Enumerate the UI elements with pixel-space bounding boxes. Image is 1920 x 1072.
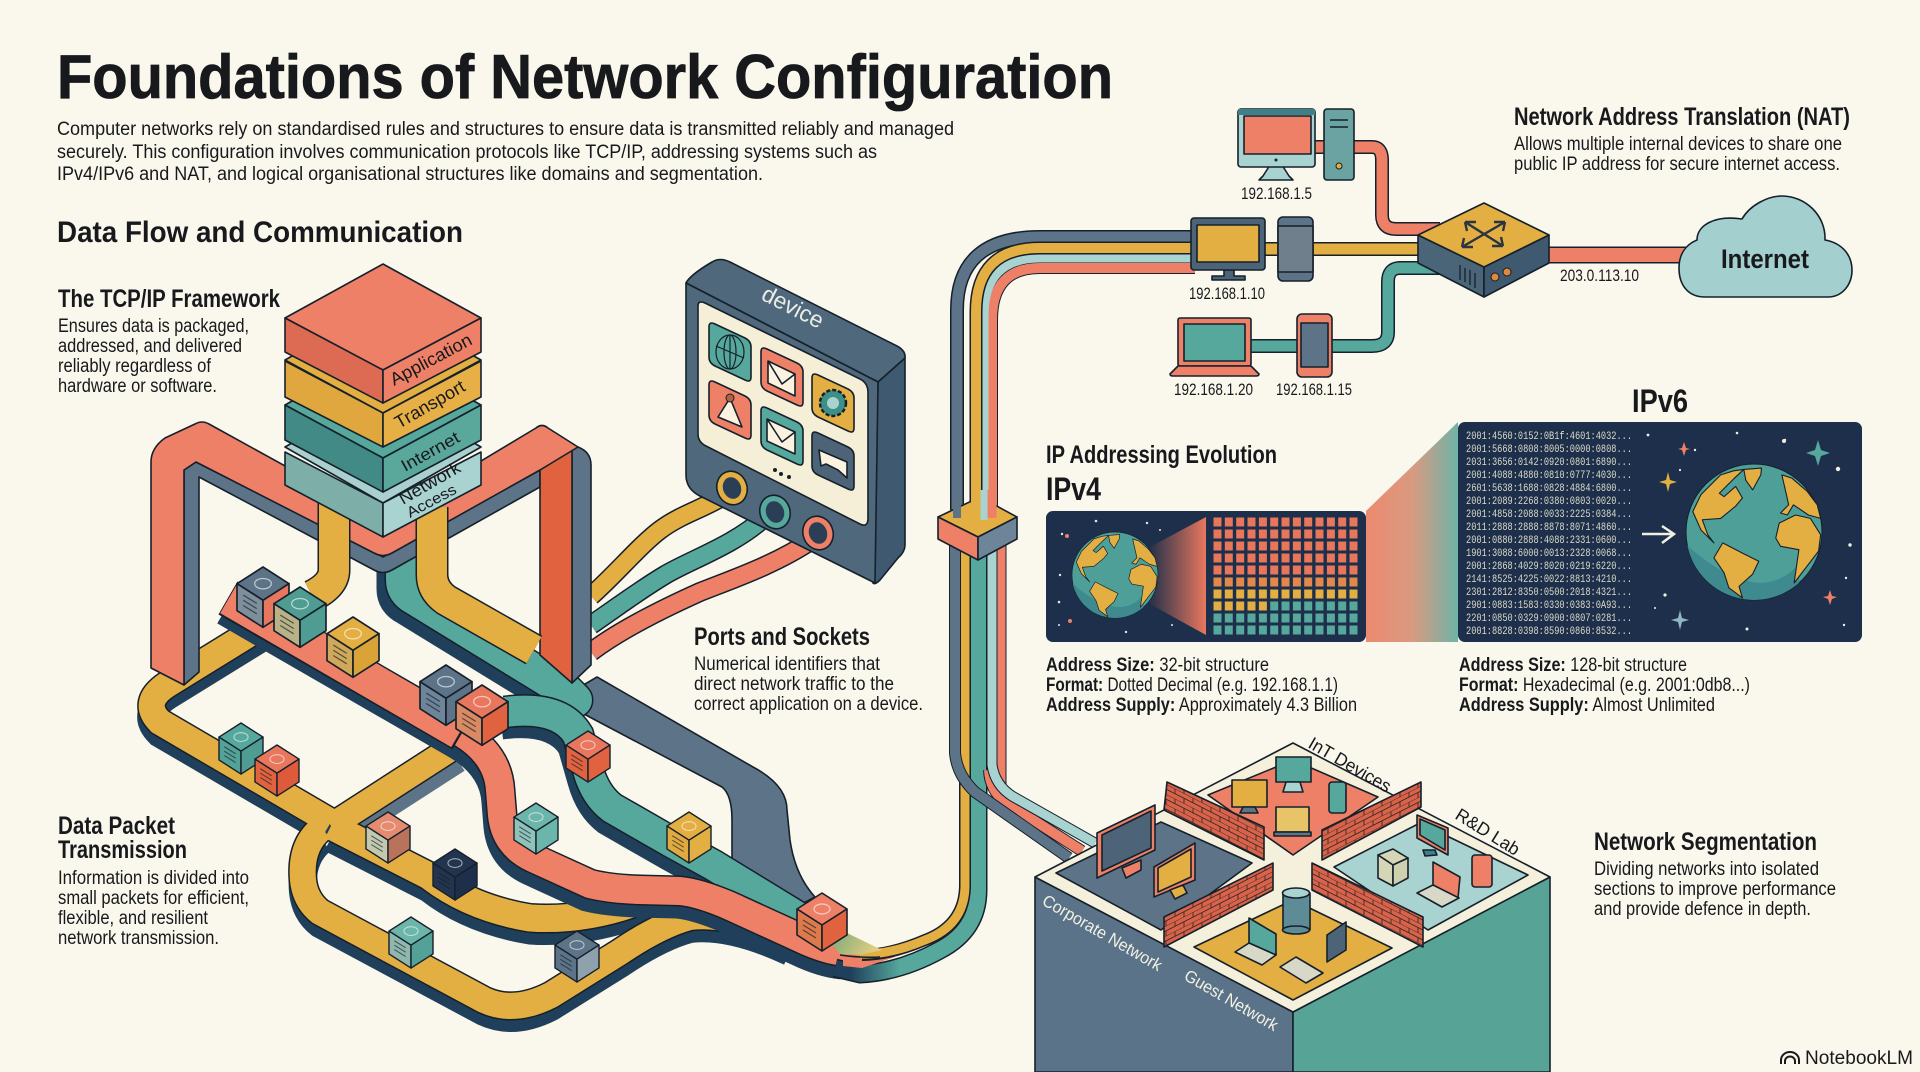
layer: transport: [285, 305, 481, 447]
icon: internet cloud: [1679, 196, 1852, 297]
text: NAT: Allows multiple internal devices to share one: [1514, 134, 1842, 155]
coral frame around stack: [151, 422, 591, 685]
hexadecimal list: 2001:2089:2268:0380:0803:0020...: [1466, 496, 1632, 508]
text: ports and sockets: [694, 623, 923, 715]
block left face: [1035, 877, 1293, 1072]
IPv4 facts: [1046, 655, 1357, 716]
hexadecimal list: 2901:0883:1583:0330:0383:0A93...: [1466, 600, 1632, 612]
packet cube 2: [274, 587, 326, 647]
hexadecimal list: 2001:0880:2888:4088:2331:0600...: [1466, 535, 1632, 547]
device tablet with app icons: [686, 260, 905, 584]
hexadecimal list: 2001:8828:0398:8590:0860:8532...: [1466, 626, 1632, 638]
text: TCP/IP framework: Ensures data is packaged,: [58, 316, 249, 337]
tablet side: [873, 358, 905, 584]
text: network segmentation: Dividing networks into isolated: [1594, 859, 1819, 880]
tablet front: [686, 283, 878, 583]
zone label: corporate: Corporate Network: [1039, 891, 1166, 975]
intro text: [57, 119, 954, 185]
link: coral: [1315, 147, 1440, 229]
section heading: data flow: Data Flow and Communication: [57, 216, 463, 249]
panel: IPv6: [1458, 422, 1862, 642]
zone: guest: [1194, 900, 1392, 1000]
IP labels: 192.168.1.20: [1174, 380, 1253, 399]
firewall walls: [1164, 782, 1423, 947]
pipe: teal lower run: [501, 711, 825, 941]
icon: monitor 192.168.1.10: [1191, 218, 1265, 280]
intro text: Computer networks rely on standardised rules and structures to ensure data is transmitted reliably and managed: [57, 119, 954, 140]
text: network segmentation: sections to improve performance: [1594, 879, 1836, 900]
text: network segmentation: and provide defence in depth.: [1594, 899, 1811, 920]
hexadecimal list: 2001:5668:0808:8005:0000:0808...: [1466, 444, 1632, 456]
layer: transport: Transport: [391, 376, 469, 432]
text: ports and sockets: direct network traffic to the: [694, 674, 894, 695]
IPv4 facts: Format: Dotted Decimal (e.g. 192.168.1.1): [1046, 675, 1338, 696]
trunk: yellow and teal to packets: [835, 545, 978, 974]
IoT devices: [1232, 757, 1346, 836]
trunk end wedge: [830, 933, 882, 955]
IPv6 facts: Address Size: 128-bit structure: [1459, 655, 1687, 676]
tablet top edge: [686, 260, 905, 382]
text: NAT: Network Address Translation (NAT): [1514, 103, 1850, 131]
expansion connector: [1366, 422, 1458, 642]
layer: network access: [285, 391, 481, 537]
packet cube 6: [566, 731, 610, 782]
icon: tower: [1324, 109, 1354, 180]
layer: network access: Network: [396, 458, 464, 508]
packets: [219, 567, 847, 982]
text: data packet transmission: Information is divided into: [58, 868, 249, 889]
address grid: [1213, 517, 1358, 635]
block right face: [1293, 877, 1550, 1072]
pipe: slate band: [575, 677, 815, 905]
layer: network access: Access: [404, 481, 460, 522]
pipe: yellow network: [152, 626, 790, 1018]
IPv6 facts: Address Supply: Almost Unlimited: [1459, 695, 1715, 716]
app dots: [773, 468, 791, 479]
port cables: [591, 497, 812, 652]
packet cube 9: [366, 812, 410, 863]
IPv4 facts: Address Supply: Approximately 4.3 Billion: [1046, 695, 1357, 716]
packet cube 13: [797, 893, 847, 951]
heading: IP addressing evolution: IP Addressing Evolution: [1046, 441, 1277, 469]
IPv4 facts: Address Size: 32-bit structure: [1046, 655, 1269, 676]
link: teal: [1245, 268, 1440, 346]
packet cube 11: [514, 803, 558, 854]
icon: router: [1418, 203, 1549, 297]
zone label: guest: Guest Network: [1181, 966, 1282, 1035]
packet cube 14: [389, 917, 433, 968]
stars: [1058, 520, 1173, 633]
text: data packet transmission: Data Packet: [58, 812, 176, 840]
device label: device: [758, 280, 828, 333]
arrow: [1642, 526, 1674, 543]
beam: [1148, 517, 1206, 635]
icon: desktop 192.168.1.5: [1238, 109, 1315, 180]
corporate devices: [1097, 805, 1195, 899]
hexadecimal list: 2011:2888:2888:8878:8071:4860...: [1466, 522, 1632, 534]
text: TCP/IP framework: hardware or software.: [58, 376, 217, 397]
packet cube 12: [667, 812, 711, 863]
hexadecimal list: 2031:3656:0142:0920:0801:6890...: [1466, 457, 1632, 469]
pipe: coral platform and run: [225, 598, 845, 964]
text: TCP/IP framework: The TCP/IP Framework: [58, 285, 280, 313]
link: coral to internet: [1545, 246, 1690, 264]
text: NAT: public IP address for secure internet access.: [1514, 154, 1840, 175]
IP labels: [1174, 184, 1639, 399]
icon: phone coral: [1297, 314, 1332, 377]
hexadecimal list: [1466, 431, 1632, 638]
IP labels: 192.168.1.5: [1241, 184, 1312, 203]
icon: mail app teal: [761, 407, 803, 465]
IP labels: 192.168.1.15: [1276, 380, 1352, 399]
intro text: securely. This configuration involves communication protocols like TCP/IP, addressing systems such as: [57, 142, 877, 163]
hexadecimal list: 2141:8525:4225:0022:8813:4210...: [1466, 574, 1632, 586]
text: data packet transmission: [58, 812, 249, 949]
packet cube 8: [255, 745, 299, 796]
packet cube 1: [237, 567, 289, 627]
icon: internet cloud: Internet: [1721, 244, 1809, 274]
text: data packet transmission: Transmission: [58, 836, 187, 864]
text: ports and sockets: Ports and Sockets: [694, 623, 870, 651]
port: yellow: [712, 467, 752, 509]
panel: IPv4: [1046, 511, 1366, 642]
packet cube 10: [433, 849, 477, 900]
text: network segmentation: [1594, 828, 1836, 920]
text: data packet transmission: flexible, and resilient: [58, 908, 209, 929]
icon: mail app coral: [761, 348, 803, 406]
network segmentation block: [1035, 733, 1550, 1072]
hexadecimal list: 2001:4858:2088:0033:2225:0384...: [1466, 509, 1632, 521]
IPv6 facts: Format: Hexadecimal (e.g. 2001:0db8...): [1459, 675, 1750, 696]
packet cube 7: [219, 723, 263, 774]
sparkles: [1659, 440, 1837, 630]
fibre trunk: [830, 237, 1250, 974]
layer: application: Application: [386, 330, 475, 390]
block top: [1035, 743, 1550, 1012]
trunk: bands to segmentation block: [955, 545, 1095, 858]
text: network segmentation: Network Segmentation: [1594, 828, 1817, 856]
link: yellow: [1260, 242, 1430, 256]
packet cube 5: [456, 685, 508, 745]
hexadecimal list: 2001:2868:4029:8020:0219:6220...: [1466, 561, 1632, 573]
packet cube 15: [555, 931, 599, 982]
layer: application: [285, 264, 481, 403]
icon: laptop: [1170, 318, 1259, 376]
text: TCP/IP framework: addressed, and delivered: [58, 336, 242, 357]
IP labels: 192.168.1.10: [1189, 284, 1265, 303]
coupler box on trunk: [938, 490, 1017, 560]
heading: IPv6: IPv6: [1632, 383, 1688, 419]
text: TCP/IP framework: reliably regardless of: [58, 356, 212, 377]
R&D devices: [1378, 815, 1492, 907]
hexadecimal list: 2301:2812:8350:0500:2018:4321...: [1466, 587, 1632, 599]
icon: penguin app: [709, 381, 751, 439]
IP labels: 203.0.113.10: [1560, 266, 1639, 285]
screen: [698, 302, 868, 525]
hexadecimal list: 2001:4560:0152:0B1f:4601:4032...: [1466, 431, 1632, 443]
hexadecimal list: 2001:4088:4880:0810:0777:4030...: [1466, 470, 1632, 482]
icon: gamepad app: [812, 432, 854, 490]
zone label: IoT devices: InT Devices: [1305, 733, 1395, 796]
port: teal: [755, 491, 795, 533]
layer: internet: [285, 350, 481, 492]
hexadecimal list: 2201:0850:0329:0900:0807:0281...: [1466, 613, 1632, 625]
zone: corporate: [1056, 822, 1252, 930]
hexadecimal list: 1901:3088:6000:0013:2328:0068...: [1466, 548, 1632, 560]
text: NAT: [1514, 103, 1850, 175]
NotebookLM logo: NotebookLM: [1805, 1048, 1913, 1069]
icon: phone slate: [1278, 217, 1313, 281]
heading: IPv4: IPv4: [1046, 471, 1101, 507]
globe small: [1072, 532, 1158, 618]
icon: globe app: [709, 323, 751, 381]
trunk: upper bands to NAT: [957, 237, 1250, 510]
IPv6 facts: [1459, 655, 1750, 716]
layer: internet: Internet: [398, 428, 463, 475]
globe large: [1686, 464, 1822, 600]
text: ports and sockets: Numerical identifiers that: [694, 654, 881, 675]
pipe: teal from stack: [395, 555, 575, 709]
guest devices: [1235, 888, 1346, 983]
NAT diagram: [1170, 109, 1852, 399]
packet cube 3: [327, 617, 379, 677]
text: data packet transmission: small packets for efficient,: [58, 888, 249, 909]
text: ports and sockets: correct application on a device.: [694, 694, 923, 715]
packet network pipes: [152, 555, 845, 1018]
TCP/IP layer stack: [285, 264, 481, 537]
stars: [1647, 432, 1852, 630]
icon: gear app: [812, 374, 854, 432]
text: TCP/IP framework: [58, 285, 280, 397]
zone: R&D: [1334, 823, 1528, 930]
title: Foundations of Network Configuration: [57, 43, 1113, 112]
text: data packet transmission: network transmission.: [58, 928, 219, 949]
zone label: R&D lab: R&D Lab: [1452, 804, 1524, 860]
packet cube 4: [420, 665, 472, 725]
port: coral: [798, 512, 838, 554]
zone: IoT: [1208, 760, 1378, 855]
hexadecimal list: 2601:5638:1688:0828:4884:6800...: [1466, 483, 1632, 495]
intro text: IPv4/IPv6 and NAT, and logical organisational structures like domains and segmentation.: [57, 164, 763, 185]
yellow cables from stack: [312, 500, 534, 650]
